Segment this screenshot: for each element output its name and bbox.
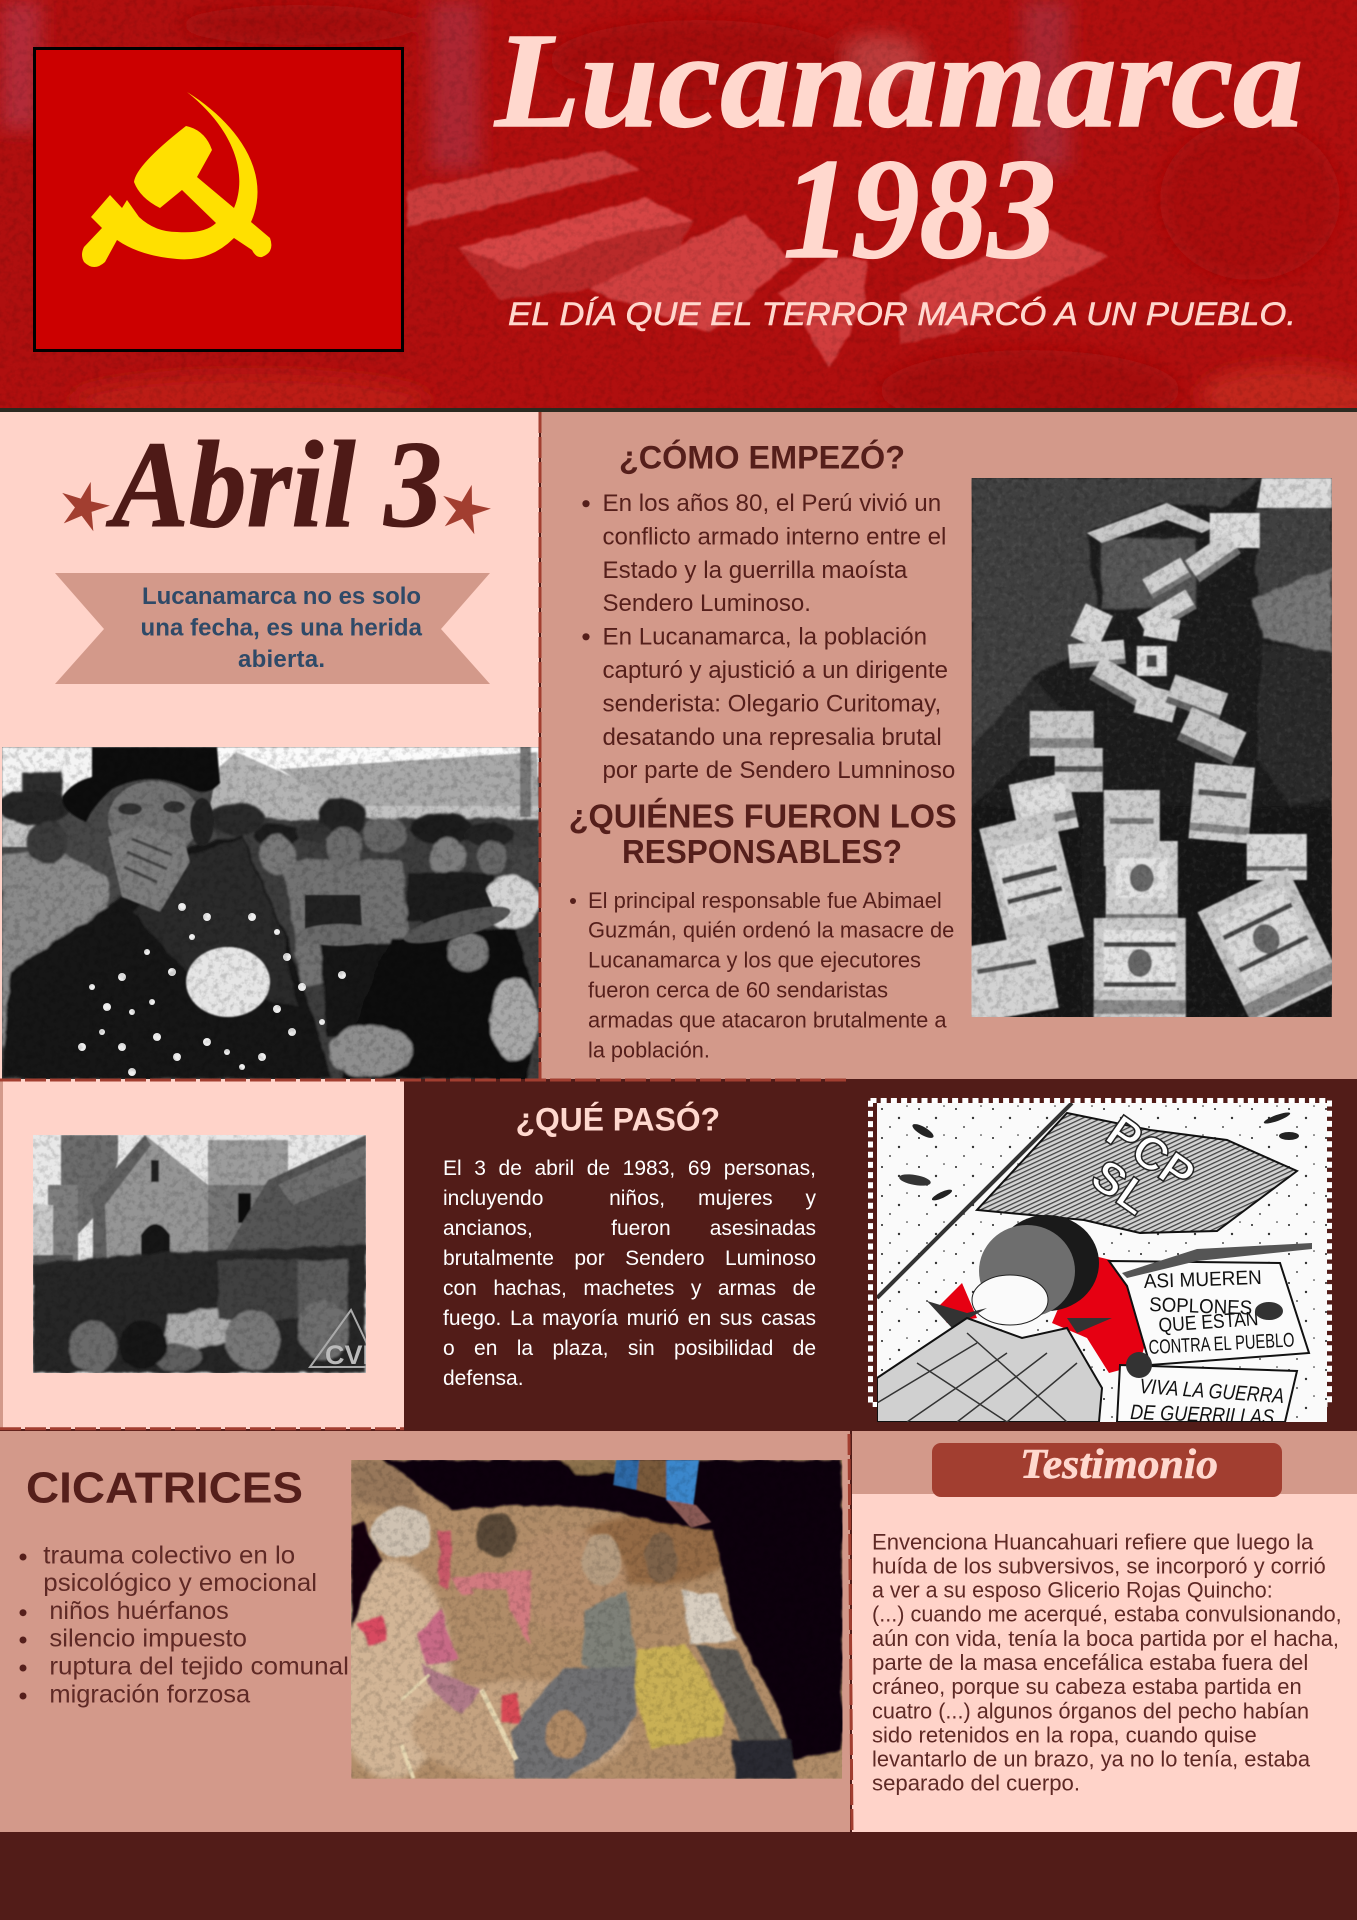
bullet list: how it began: conflicto armado interno entre el (602, 523, 946, 550)
photo: grieving woman and crowd (2, 747, 539, 1079)
bullet list: how it began: senderista: Olegario Curitomay, (602, 690, 941, 717)
bullet list: scars: ruptura del tejido comunal (49, 1653, 349, 1681)
text block: testimony: Envenciona Huancahuari refiere que luego la (872, 1529, 1314, 1554)
bullet list: responsibles: fueron cerca de 60 sendaristas (588, 978, 888, 1003)
text block: testimony: separado del cuerpo. (872, 1771, 1080, 1796)
text block: what happened: brutalmente por Sendero Luminoso (443, 1247, 816, 1270)
heading: quienes fueron: RESPONSABLES? (622, 833, 902, 870)
heading: como empezo: ¿CÓMO EMPEZÓ? (619, 440, 905, 476)
text block: testimony: cráneo, porque su cabeza estaba partida en (872, 1674, 1302, 1699)
panel: testimony (852, 1431, 1357, 1832)
icon: right star (436, 478, 496, 537)
photo: coffins carried through the village (972, 478, 1332, 1017)
text block: testimony: sido retenidos en la ropa, cuando quise (872, 1722, 1257, 1747)
footer band (0, 1832, 1357, 1920)
bullet list: responsibles: El principal responsable fue Abimael (588, 888, 942, 913)
cartoon: dotted frame and PCP SL illustration: PCP (1097, 1105, 1205, 1201)
heading: Abril 3: Abril 3 (105, 416, 442, 553)
text block: testimony: parte de la masa encefálica estaba fuera del (872, 1650, 1308, 1675)
bullet list: responsibles: Guzmán, quién ordenó la masacre de (588, 918, 954, 943)
ribbon callout: abierta. (238, 646, 325, 673)
bullet list: scars: silencio impuesto (49, 1625, 247, 1653)
cartoon: dotted frame and PCP SL illustration: QUE ESTAN (1158, 1308, 1259, 1337)
text block: what happened: fuego. La mayoría murió en sus casas (443, 1307, 816, 1330)
text block: what happened: incluyendo niños, mujeres y (443, 1187, 816, 1210)
heading: que paso: ¿QUÉ PASÓ? (516, 1102, 720, 1138)
bullet list: how it began: En los años 80, el Perú vivió un (602, 490, 941, 517)
photo: church and gathered villagers: CVR (325, 1340, 382, 1370)
bullet list: scars: trauma colectivo en lo (43, 1541, 295, 1569)
bullet list: how it began: desatando una represalia brutal (602, 724, 942, 751)
panel: church photo area (0, 1080, 404, 1429)
bullet list: how it began (582, 490, 955, 784)
text block: what happened: El 3 de abril de 1983, 69 personas, (443, 1157, 816, 1180)
photo: exhumed grave (351, 1460, 842, 1779)
bullet list: scars: niños huérfanos (49, 1597, 229, 1625)
bullet list: how it began: Estado y la guerrilla maoísta (602, 557, 908, 584)
icon: red flag with hammer and sickle (34, 48, 402, 350)
text block: what happened (443, 1157, 816, 1390)
cartoon: dotted frame and PCP SL illustration (870, 1100, 1330, 1429)
panel: how it began and responsibles (541, 412, 1357, 1080)
badge: testimonio heading (932, 1442, 1282, 1497)
bullet list: how it began: por parte de Sendero Lumninoso (602, 757, 955, 784)
text block: what happened: con hachas, machetes y armas de (443, 1277, 816, 1300)
heading: quienes fueron: ¿QUIÉNES FUERON LOS (569, 798, 957, 835)
panel: header banner (0, 0, 1357, 430)
heading: quienes fueron (569, 798, 957, 870)
text block: what happened: ancianos, fueron asesinadas (443, 1217, 816, 1240)
text block: testimony: cuatro (...) algunos órganos del pecho habían (872, 1698, 1309, 1723)
header edge line (0, 408, 1357, 412)
panel: scars (0, 1431, 850, 1832)
panel: what happened (404, 1079, 1357, 1431)
ribbon callout: Lucanamarca no es solo (142, 583, 421, 610)
bullet list: how it began: Sendero Luminoso. (602, 590, 811, 617)
text block: testimony (872, 1529, 1342, 1796)
cartoon: dotted frame and PCP SL illustration: ASI MUEREN (1143, 1267, 1262, 1293)
subtitle: EL DÍA QUE EL TERROR MARCÓ A UN PUEBLO. (508, 296, 1296, 332)
panel: date (0, 412, 539, 1080)
cartoon: dotted frame and PCP SL illustration: SOPLONES (1149, 1294, 1253, 1320)
photo: church and gathered villagers (33, 1135, 382, 1373)
bullet list: responsibles: Lucanamarca y los que ejecutores (588, 948, 921, 973)
bullet list: responsibles (570, 888, 954, 1062)
text block: testimony: levantarlo de un brazo, ya no lo tenía, estaba (872, 1747, 1311, 1772)
text block: testimony: aún con vida, tenía la boca partida por el hacha, (872, 1626, 1339, 1651)
bullet list: responsibles: la población. (588, 1037, 710, 1062)
ribbon callout: una fecha, es una herida (140, 614, 423, 642)
bullet list: how it began: capturó y ajustició a un dirigente (602, 657, 948, 684)
title: 1983 (783, 130, 1056, 289)
bullet list: how it began: En Lucanamarca, la población (602, 624, 927, 651)
heading: cicatrices: CICATRICES (26, 1464, 303, 1513)
text block: what happened: o en la plaza, sin posibilidad de (443, 1337, 816, 1360)
cartoon: dotted frame and PCP SL illustration: VIVA LA GUERRA (1139, 1375, 1285, 1408)
bullet list: scars: psicológico y emocional (43, 1569, 317, 1597)
title: Lucanamarca (494, 6, 1303, 156)
cartoon: dotted frame and PCP SL illustration: SL (1082, 1149, 1160, 1225)
text block: testimony: huída de los subversivos, se incorporó y corrió (872, 1553, 1326, 1578)
bullet list: scars: migración forzosa (49, 1680, 250, 1708)
text block: testimony: a ver a su esposo Glicerio Rojas Quincho: (872, 1578, 1273, 1603)
ribbon callout (55, 573, 490, 684)
bullet list: scars (20, 1541, 349, 1708)
icon: left star (55, 475, 115, 534)
cartoon: dotted frame and PCP SL illustration: DE GUERRILLAS (1130, 1401, 1275, 1429)
text block: testimony: (...) cuando me acerqué, estaba convulsionando, (872, 1602, 1342, 1627)
title (494, 6, 1303, 289)
badge: testimonio heading: Testimonio (1020, 1442, 1218, 1488)
bullet list: responsibles: armadas que atacaron brutalmente a (588, 1008, 947, 1032)
text block: what happened: defensa. (443, 1367, 524, 1390)
